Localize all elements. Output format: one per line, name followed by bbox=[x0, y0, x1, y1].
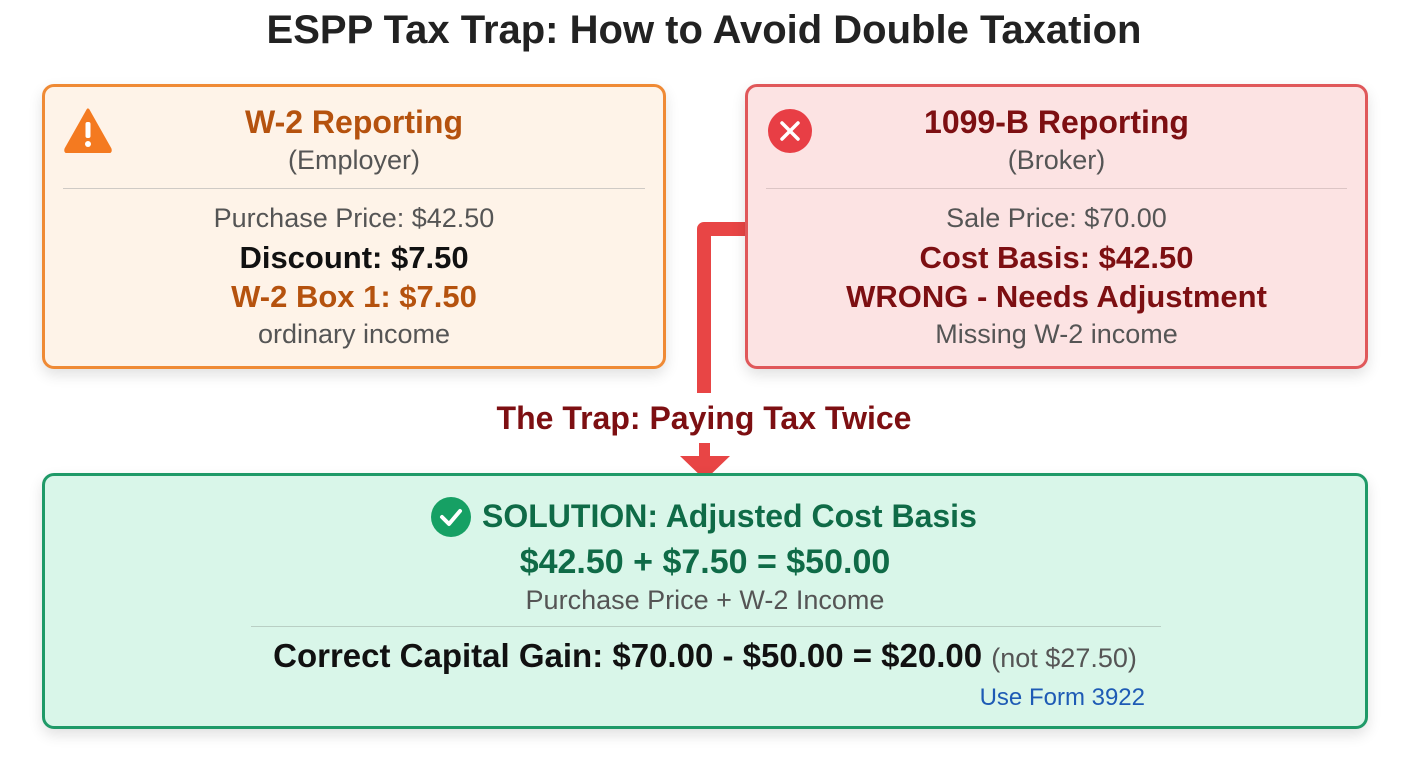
heading: 1099-B Reporting bbox=[924, 104, 1189, 140]
panel: 1099-B reporting: WRONG - Needs Adjustment bbox=[846, 279, 1267, 314]
panel: W-2 reporting: ordinary income bbox=[258, 319, 450, 349]
panel: 1099-B reporting bbox=[745, 84, 1368, 369]
panel: solution bbox=[42, 473, 1368, 729]
panel: W-2 reporting: Discount: $7.50 bbox=[239, 240, 469, 275]
panel: W-2 reporting bbox=[42, 84, 666, 369]
panel: 1099-B reporting: Cost Basis: $42.50 bbox=[920, 240, 1193, 275]
panel: W-2 reporting: (Employer) bbox=[288, 145, 420, 175]
icon: warning bbox=[64, 108, 112, 153]
solution heading: SOLUTION: Adjusted Cost Basis bbox=[482, 498, 977, 534]
panel: W-2 reporting: W-2 Box 1: $7.50 bbox=[231, 279, 477, 314]
details: Sale Price: $70.00 bbox=[946, 203, 1167, 233]
form note: Use Form 3922 bbox=[980, 684, 1145, 711]
panel: 1099-B reporting: Missing W-2 income bbox=[935, 319, 1178, 349]
icon: error bbox=[768, 109, 812, 153]
heading: W-2 Reporting bbox=[245, 104, 463, 140]
equation: $42.50 + $7.50 = $50.00 bbox=[520, 543, 890, 581]
icon: check bbox=[431, 497, 471, 537]
details: Purchase Price: $42.50 bbox=[214, 203, 494, 233]
capital gain: Correct Capital Gain: $70.00 - $50.00 = $20.00 bbox=[273, 637, 982, 674]
trap label: The Trap: Paying Tax Twice bbox=[497, 400, 911, 436]
panel: solution: Purchase Price + W-2 Income bbox=[526, 585, 884, 615]
title: ESPP Tax Trap: How to Avoid Double Taxation bbox=[267, 8, 1141, 52]
capital gain: (not $27.50) bbox=[991, 643, 1137, 673]
panel: 1099-B reporting: (Broker) bbox=[1008, 145, 1105, 175]
